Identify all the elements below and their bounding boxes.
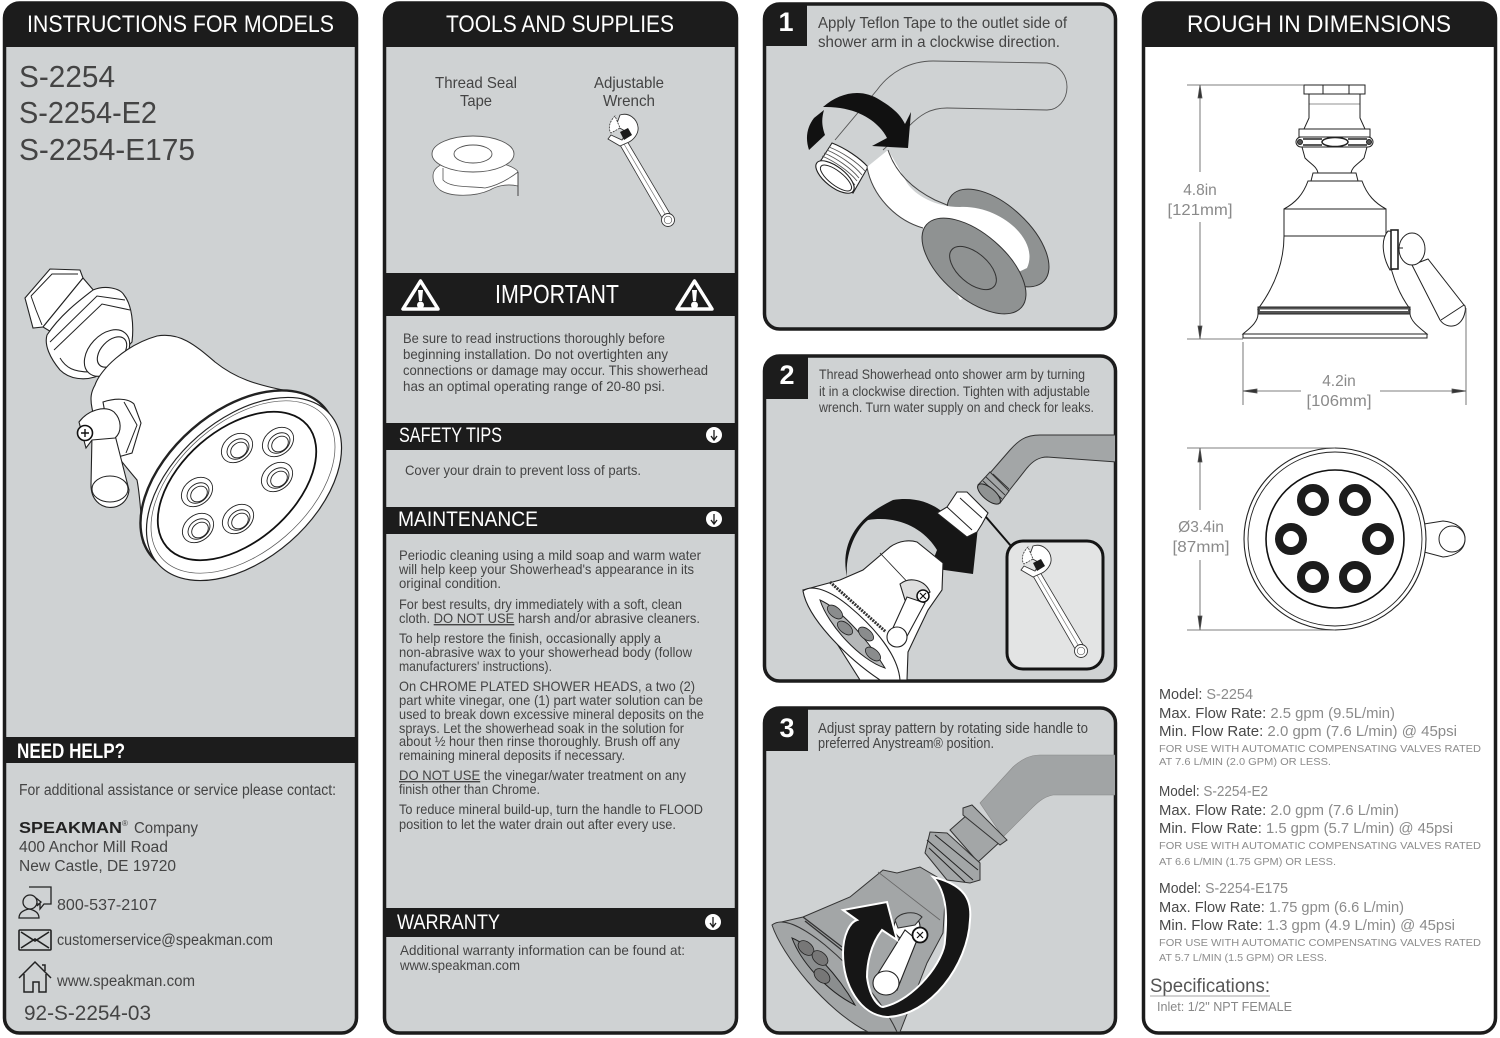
specifications: Inlet: 1/2" NPT FEMALE [1157, 1000, 1292, 1014]
bar: need help [6, 737, 355, 763]
bar: warranty: WARRANTY [397, 911, 500, 934]
panel: step 3 [764, 708, 1116, 1033]
icon: warning left [403, 281, 438, 309]
text: maintenance instructions: To help restore the finish, occasionally apply a [399, 630, 661, 646]
front spool flange [905, 201, 1043, 331]
text: maintenance instructions: original condition. [399, 575, 501, 591]
step 2 text: wrench. Turn water supply on and check for leaks. [818, 399, 1094, 415]
text: maintenance instructions: non-abrasive wax to your showerhead body (follow [399, 644, 693, 660]
showerhead body [777, 867, 945, 1032]
text: email: customerservice@speakman.com [57, 932, 273, 949]
contact text: Company [134, 820, 198, 837]
text: maintenance instructions: remaining mineral deposits if necessary. [399, 747, 625, 763]
step 3 text: preferred Anystream® position. [818, 736, 994, 752]
header: instructions for models [4, 3, 356, 47]
text: maintenance instructions: finish other than Chrome. [399, 781, 540, 797]
spec block: S-2254-E2: Max. Flow Rate: 2.0 gpm (7.6 L/min) [1159, 802, 1399, 819]
bar: warranty [386, 908, 735, 937]
bar: safety tips [386, 423, 735, 450]
drawing: front elevation [1243, 85, 1465, 338]
text: maintenance instructions: For best results, dry immediately with a soft, clean [399, 596, 682, 612]
panel: step 1 [764, 4, 1116, 331]
illustration: adjust showerhead [772, 755, 1116, 1032]
text: part number: 92-S-2254-03 [24, 1002, 151, 1025]
handle [894, 921, 920, 938]
drawing: bottom view [1244, 448, 1465, 630]
step number 2 [764, 356, 808, 399]
text: maintenance instructions: On CHROME PLATED SHOWER HEADS, a two (2) [399, 678, 695, 694]
panel: rough in dimensions [1144, 3, 1496, 1033]
icon: adjustable wrench [608, 114, 674, 226]
icon: phone support person [19, 887, 51, 918]
step 3 text [818, 721, 1088, 752]
step 3 text: Adjust spray pattern by rotating side handle to [818, 721, 1088, 737]
header: instructions for models: INSTRUCTIONS FOR MODELS [27, 11, 334, 38]
label: diameter: [87mm] [1172, 539, 1230, 556]
panel: step 2 [764, 356, 1116, 681]
spec block: S-2254-E175: FOR USE WITH AUTOMATIC COMPENSATING VALVES RATED [1159, 937, 1481, 949]
dimension: height [1187, 85, 1304, 339]
step 2 text [818, 366, 1094, 415]
inset: wrench callout [1007, 541, 1103, 669]
label: diameter [1172, 519, 1230, 556]
step 2 text: Thread Showerhead onto shower arm by turning [819, 366, 1085, 382]
step number 1: 1 [778, 7, 794, 37]
spec block: S-2254-E175: Min. Flow Rate: 1.3 gpm (4.9 L/min) @ 45psi [1159, 917, 1455, 934]
spec block: S-2254-E2 [1159, 783, 1481, 868]
step number 3 [764, 708, 808, 751]
step 1 text [818, 15, 1068, 51]
contact text: New Castle, DE 19720 [19, 858, 176, 875]
arrow: rotate handle [843, 877, 970, 1017]
label: adjustable wrench: Adjustable [594, 75, 664, 92]
side handle [78, 399, 141, 507]
model numbers: S-2254 [19, 59, 115, 94]
icon: warning right [677, 281, 712, 309]
text: warranty: Additional warranty information can be found at: [400, 942, 685, 958]
bar: important [386, 273, 735, 316]
panel: tools and supplies [384, 3, 736, 1033]
text: maintenance instructions: will help keep your Showerhead's appearance in its [398, 561, 694, 577]
illustration: threading showerhead [803, 435, 1116, 680]
side handle front [1383, 231, 1398, 270]
bar: maintenance: MAINTENANCE [398, 508, 538, 531]
showerhead body [803, 541, 943, 680]
label: thread seal tape: Tape [460, 93, 492, 110]
contact text: For additional assistance or service please contact: [19, 782, 336, 799]
label: diameter: Ø3.4in [1178, 519, 1224, 536]
thread section [811, 143, 868, 199]
text: important notice: beginning installation. Do not overtighten any [403, 346, 668, 362]
spec block: S-2254-E175 [1159, 880, 1481, 964]
spec block: S-2254-E2: Model: S-2254-E2 [1159, 783, 1268, 800]
step 2 text: it in a clockwise direction. Tighten with adjustable [819, 383, 1090, 399]
spec block: S-2254: Min. Flow Rate: 2.0 gpm (7.6 L/min) @ 45psi [1159, 723, 1457, 740]
adapter neck [937, 492, 988, 537]
illustration: showerhead [25, 269, 376, 617]
label: width: [106mm] [1306, 393, 1372, 410]
bar: maintenance [386, 507, 735, 534]
text: maintenance instructions: position to let the water drain out after every use. [399, 816, 676, 832]
step 1 text: Apply Teflon Tape to the outlet side of [818, 15, 1068, 32]
spec block: S-2254: AT 7.6 L/MIN (2.0 GPM) OR LESS. [1159, 756, 1331, 768]
spec block: S-2254 [1159, 686, 1481, 768]
spec block: S-2254-E2: AT 6.6 L/MIN (1.75 GPM) OR LESS. [1159, 856, 1336, 868]
step number 3: 3 [779, 713, 795, 743]
illustration: shower arm with tape [807, 61, 1067, 331]
back spool flange [930, 172, 1066, 304]
jets [1279, 488, 1390, 589]
text: maintenance instructions: used to break down excessive mineral deposits on the [399, 706, 704, 722]
connector [950, 808, 1002, 862]
dimension: width [1243, 308, 1466, 405]
text: important notice: connections or damage may occur. This showerhead [403, 362, 708, 378]
contact text: SPEAKMAN [19, 820, 122, 837]
header: tools and supplies [384, 3, 736, 47]
specifications: Specifications: [1150, 976, 1270, 997]
spray jets [176, 421, 299, 549]
text: warranty [399, 942, 685, 973]
spec block: S-2254-E175: Model: S-2254-E175 [1159, 880, 1288, 897]
bar: need help: NEED HELP? [17, 740, 125, 763]
spec block: S-2254: Max. Flow Rate: 2.5 gpm (9.5L/min) [1159, 705, 1395, 722]
step number 1 [764, 4, 807, 46]
specifications [1150, 976, 1292, 1014]
dimension: diameter [1187, 448, 1335, 630]
text: maintenance instructions: cloth. DO NOT USE harsh and/or abrasive cleaners. [399, 610, 700, 626]
model numbers: S-2254-E175 [19, 132, 195, 167]
text: maintenance instructions: sprays. Let the showerhead soak in the solution for [399, 720, 684, 736]
text: warranty: www.speakman.com [399, 957, 520, 973]
text: phone number: 800-537-2107 [57, 897, 157, 914]
spec block: S-2254: Model: S-2254 [1159, 686, 1253, 703]
text: important notice: Be sure to read instructions thoroughly before [403, 330, 665, 346]
text: maintenance instructions: part white vinegar, one (1) part water solution can be [399, 692, 703, 708]
text: important notice: has an optimal operating range of 20-80 psi. [403, 378, 665, 394]
icon: tape roll [432, 136, 518, 196]
bar: safety tips: SAFETY TIPS [399, 424, 502, 447]
callout line [986, 517, 1011, 546]
shower arm [980, 755, 1116, 837]
contact text: ® [122, 819, 128, 828]
text: maintenance instructions: To reduce mineral build-up, turn the handle to FLOOD [399, 801, 703, 817]
text: safety tip: Cover your drain to prevent loss of parts. [405, 462, 641, 478]
text: maintenance instructions [398, 547, 704, 832]
text: important notice [403, 330, 708, 394]
step number 2: 2 [779, 360, 795, 390]
step 1 text: shower arm in a clockwise direction. [818, 34, 1060, 51]
handle [900, 580, 930, 603]
text: maintenance instructions: manufacturers' instructions). [399, 658, 552, 674]
text: website: www.speakman.com [56, 973, 195, 990]
spec block: S-2254-E175: AT 5.7 L/MIN (1.5 GPM) OR LESS. [1159, 952, 1327, 964]
tape strip [867, 150, 1029, 300]
text: maintenance instructions: DO NOT USE the vinegar/water treatment on any [399, 767, 686, 783]
spec block: S-2254-E2: Min. Flow Rate: 1.5 gpm (5.7 L/min) @ 45psi [1159, 820, 1453, 837]
label: width: 4.2in [1322, 373, 1356, 390]
contact text [19, 782, 336, 875]
panel: instructions for models [4, 3, 376, 1033]
model numbers [19, 59, 195, 167]
spec block: S-2254-E175: Max. Flow Rate: 1.75 gpm (6.6 L/min) [1159, 899, 1404, 916]
label: height: 4.8in [1183, 182, 1217, 199]
spec block: S-2254-E2: FOR USE WITH AUTOMATIC COMPENSATING VALVES RATED [1159, 840, 1481, 852]
text: maintenance instructions: about ½ hour then rinse thoroughly. Brush off any [399, 733, 680, 749]
icon: envelope [19, 930, 51, 950]
label: width [1306, 373, 1372, 410]
model numbers: S-2254-E2 [19, 95, 157, 130]
label: adjustable wrench [594, 75, 664, 110]
text: maintenance instructions: Periodic cleaning using a mild soap and warm water [399, 547, 701, 563]
arrow: wrap direction [807, 93, 911, 150]
label: thread seal tape: Thread Seal [435, 75, 517, 92]
header: rough in dimensions: ROUGH IN DIMENSIONS [1187, 11, 1451, 38]
spec block: S-2254: FOR USE WITH AUTOMATIC COMPENSATING VALVES RATED [1159, 743, 1481, 755]
spray face [772, 922, 897, 1032]
label: thread seal tape [435, 75, 517, 110]
icon: house [19, 962, 51, 992]
label: height [1168, 182, 1232, 219]
shower arm [990, 435, 1116, 492]
label: height: [121mm] [1168, 202, 1232, 219]
label: adjustable wrench: Wrench [603, 93, 655, 110]
arrow: clockwise [845, 499, 978, 577]
header: tools and supplies: TOOLS AND SUPPLIES [446, 11, 674, 38]
contact text: 400 Anchor Mill Road [19, 839, 168, 856]
bar: important: IMPORTANT [495, 279, 619, 309]
header: rough in dimensions [1144, 3, 1496, 47]
